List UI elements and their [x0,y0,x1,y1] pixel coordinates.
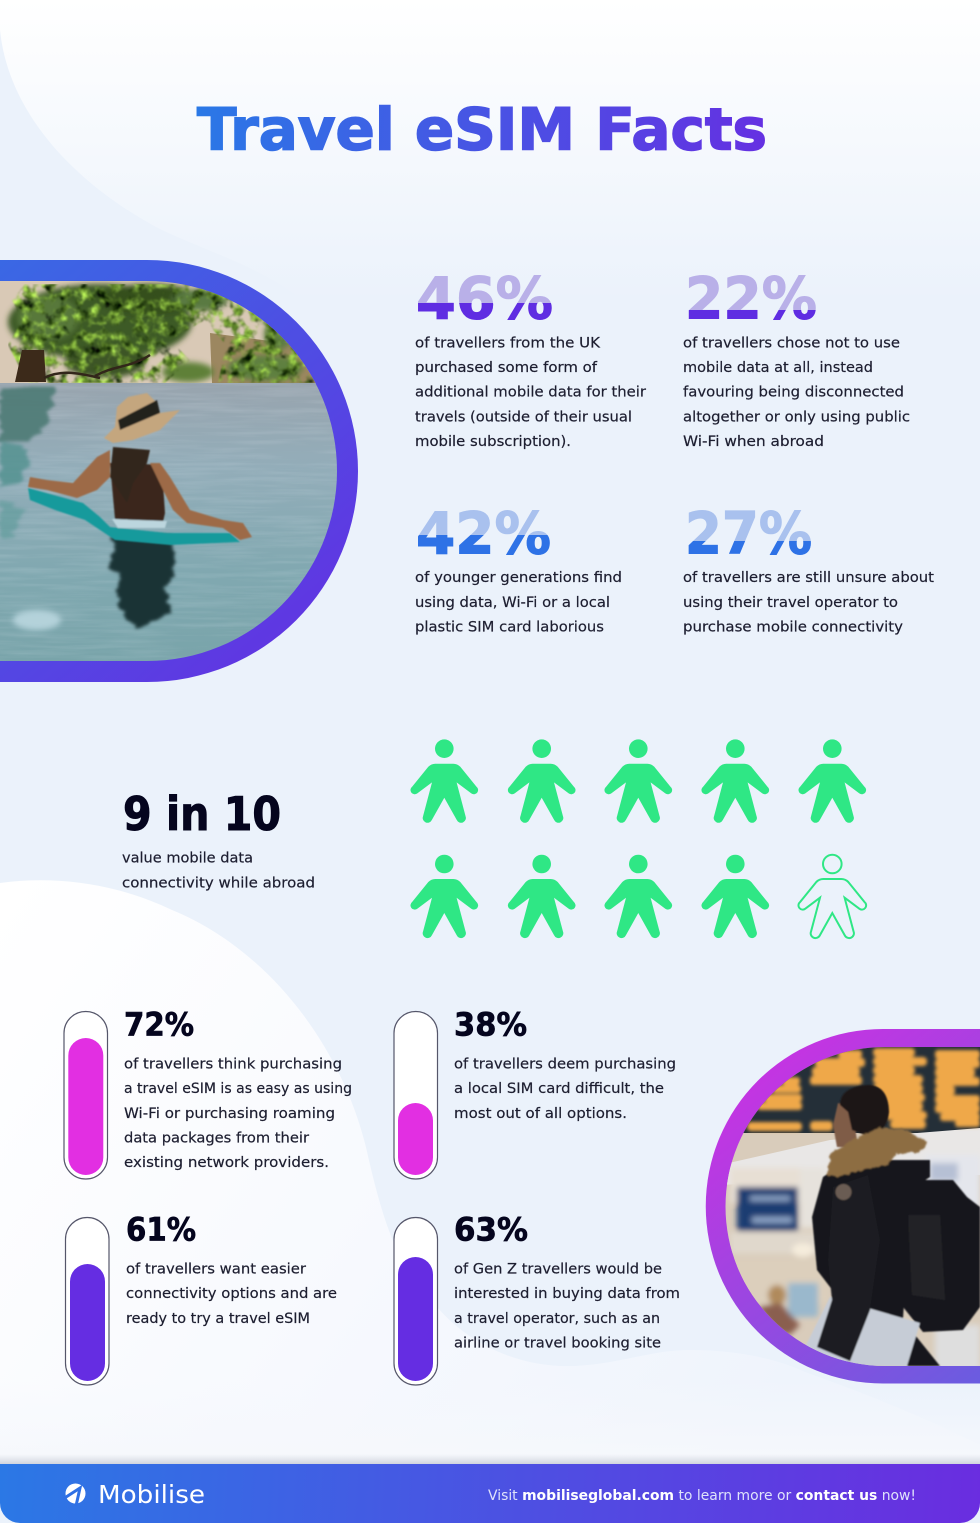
hair [840,1085,889,1137]
stat: 22%: Wi-Fi when abroad [683,434,824,450]
stat: 63% with gauge: of Gen Z travellers would be [454,1262,662,1278]
stat: 9 in 10: 9 in 10 [123,787,281,841]
stat: 63% with gauge: a travel operator, such as an [454,1311,660,1327]
hair [110,447,150,503]
photo frame: traveller at airport [706,1029,980,1384]
stat: 61% with gauge: of travellers want easier [126,1262,306,1278]
jacket [812,1160,940,1366]
stat: 72% with gauge: a travel eSIM is as easy as using [124,1081,352,1097]
footer shadow [0,1454,980,1465]
stat: 9 in 10: connectivity while abroad [122,875,315,891]
soft patch in the water [13,610,61,630]
stat: 22% [683,264,910,450]
stat: 72% with gauge: 72% [124,1006,194,1044]
stat: 38% with gauge: 38% [454,1006,527,1044]
stat: 27% [683,500,934,635]
fur collar [827,1127,928,1177]
stat: 72% with gauge: existing network providers. [124,1155,329,1171]
background fade above footer [0,1380,980,1464]
logo mark [63,1484,86,1506]
stat: 38% with gauge [394,1006,676,1179]
stat: 63% with gauge: airline or travel booking site [454,1335,661,1351]
stat: 27%: 27% [685,500,812,568]
stat: 27%: 27% [685,500,812,568]
stat: 46%: 46% [416,264,553,332]
stat: 27%: of travellers are still unsure about [683,570,934,586]
teal float [28,488,240,545]
stat: 22%: 22% [685,264,817,332]
stat: 46%: additional mobile data for their [415,385,646,401]
stat: 38% with gauge: of travellers deem purchasing [454,1056,676,1072]
stat: 61% with gauge [66,1210,337,1385]
neck and face [833,1103,858,1147]
shoulder patch [836,1184,852,1200]
stat: 61% with gauge: connectivity options and are [126,1286,337,1302]
stat: 42%: plastic SIM card laborious [415,619,604,635]
background curve: top [0,0,980,300]
arms [28,450,110,498]
stat: 72% with gauge [64,1006,352,1179]
stat: 46%: of travellers from the UK [415,336,601,352]
stat: 22%: mobile data at all, instead [683,360,873,376]
stat: 22%: of travellers chose not to use [683,336,900,352]
stat: 27%: using their travel operator to [683,595,898,611]
stat: 72% with gauge: Wi-Fi or purchasing roaming [124,1106,335,1122]
stat: 63% with gauge: interested in buying data from [454,1286,680,1302]
backpack [903,1180,980,1332]
hat [104,393,180,443]
stat: 9 in 10 [122,787,315,891]
stat: 22%: favouring being disconnected [683,385,904,401]
stat: 38% with gauge: most out of all options. [454,1106,627,1122]
stat: 46%: purchased some form of [415,360,598,376]
stat: 63% with gauge: 63% [454,1210,528,1248]
sleeve [816,1288,871,1362]
footer call to action: Visit mobiliseglobal.com to learn more or contact us now! [488,1488,916,1504]
brand name: Mobilise [98,1480,205,1509]
stat: 61% with gauge: ready to try a travel eSIM [126,1311,310,1327]
background curve: lower [0,880,980,1464]
stat: 42%: of younger generations find [415,570,622,586]
stat: 46%: travels (outside of their usual [415,409,632,425]
title: Travel eSIM Facts [197,96,767,164]
footer bar [0,1464,980,1523]
photo frame: woman in pool [0,260,358,682]
stat: 46% [415,264,646,450]
reflection of the swimmer [110,535,175,628]
pictogram: 9 of 10 people [410,739,866,938]
stat: 46%: mobile subscription). [415,434,571,450]
stat: 72% with gauge: of travellers think purchasing [124,1056,342,1072]
torso [110,463,165,522]
laptop [805,1297,920,1366]
stat: 9 in 10: value mobile data [122,850,253,866]
stat: 42%: 42% [416,500,551,568]
stat: 42%: using data, Wi-Fi or a local [415,595,610,611]
stat: 22%: 22% [685,264,817,332]
stat: 42% [415,500,622,635]
stat: 42%: 42% [416,500,551,568]
stat: 61% with gauge: 61% [126,1210,196,1248]
stat: 72% with gauge: data packages from their [124,1130,309,1146]
stat: 27%: purchase mobile connectivity [683,619,903,635]
stat: 22%: altogether or only using public [683,409,910,425]
stat: 46%: 46% [416,264,553,332]
stat: 38% with gauge: a local SIM card difficult, the [454,1081,664,1097]
stat: 63% with gauge [394,1210,680,1385]
